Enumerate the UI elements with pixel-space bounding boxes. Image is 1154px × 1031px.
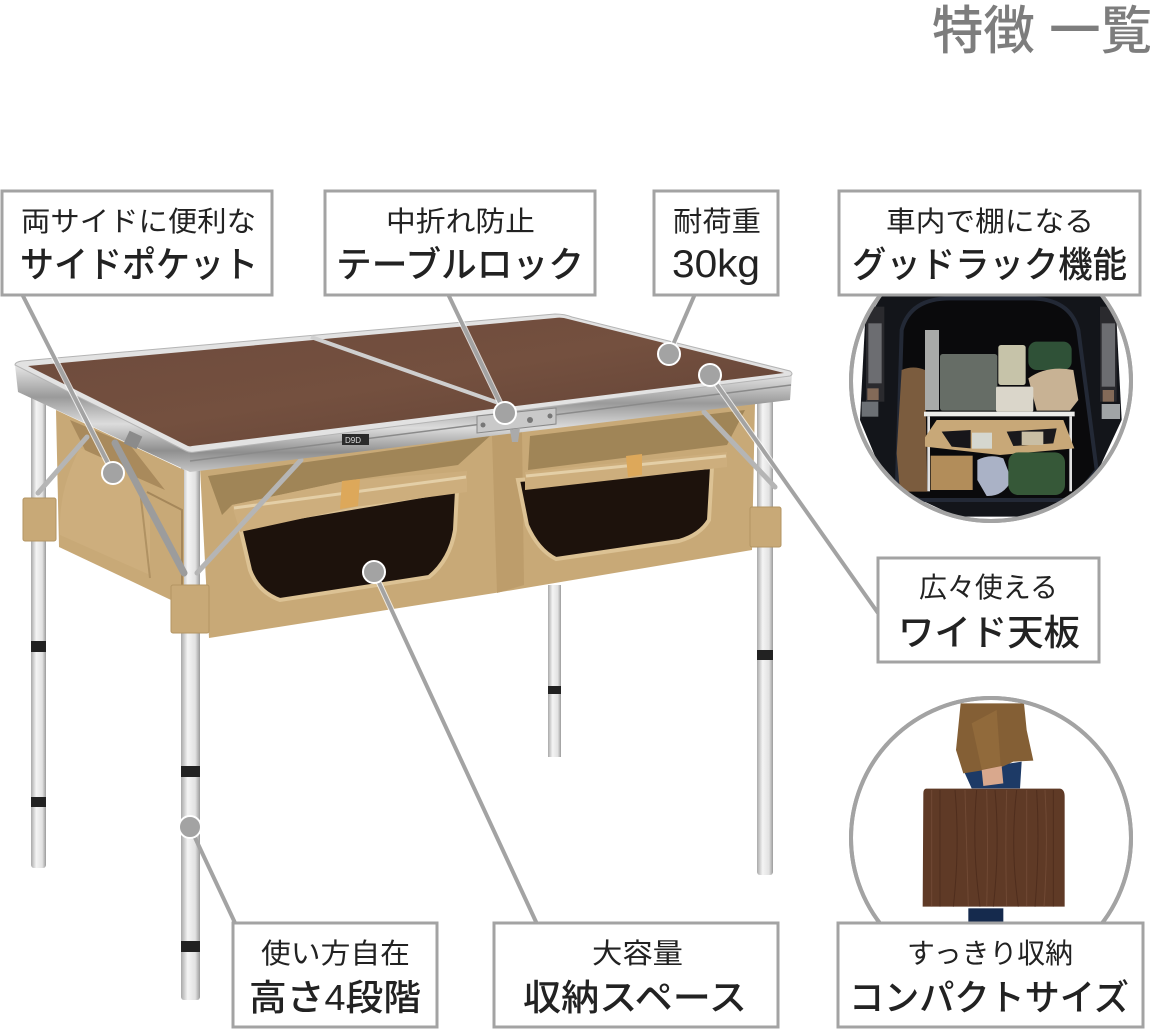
leader: side pocket — [22, 294, 124, 484]
leader: height — [179, 816, 236, 925]
callout: good rack — [839, 191, 1140, 295]
trunk opening — [897, 298, 1097, 500]
leader: load — [658, 294, 695, 365]
callout: good rack: グッドラック機能 — [852, 244, 1127, 285]
inset photo: carrying folded table — [849, 696, 1133, 922]
beige water jug — [998, 345, 1026, 385]
green duffel — [1008, 452, 1065, 495]
callout: side pocket — [2, 191, 272, 295]
callout: table lock: 中折れ防止 — [386, 206, 535, 237]
shelf table — [924, 412, 1075, 491]
leg sleeves — [23, 498, 781, 633]
beige sack — [1028, 369, 1078, 411]
callout: storage: 収納スペース — [523, 977, 747, 1018]
callout: height: 高さ4段階 — [249, 977, 421, 1018]
left storage window — [240, 490, 457, 600]
callout: storage — [494, 923, 778, 1027]
person legs — [963, 762, 1022, 923]
right storage window — [518, 467, 712, 559]
grey storage box — [940, 354, 997, 411]
rolled window flaps — [232, 452, 727, 532]
callout: height — [233, 923, 437, 1027]
leader: wide top — [699, 364, 878, 613]
folding table product illustration — [15, 314, 792, 1000]
callout: side pocket: サイドポケット — [20, 244, 258, 285]
folded table — [925, 330, 939, 410]
rear left leg — [31, 395, 46, 868]
green bag — [1028, 342, 1072, 370]
callout: compact: コンパクトサイズ — [849, 977, 1129, 1018]
shelf storage bag — [925, 420, 1074, 455]
tail lights — [862, 307, 1120, 419]
title: 特徴 一覧 — [932, 3, 1152, 61]
jacket sleeve — [972, 710, 1001, 769]
front leg — [181, 465, 200, 1000]
car body — [860, 293, 1122, 517]
leader: storage — [363, 561, 537, 924]
callout: compact — [838, 923, 1143, 1027]
callout: wide top — [878, 558, 1099, 662]
leader lines and dots — [22, 294, 878, 925]
brown jacket — [956, 703, 1033, 773]
inset photo: car luggage rack — [849, 296, 1133, 523]
table frame sides — [15, 365, 792, 472]
white cooler — [996, 387, 1033, 412]
callout: storage: 大容量 — [592, 938, 683, 969]
side latch — [124, 431, 142, 449]
storage bag front — [200, 402, 755, 638]
callout: good rack: 車内で棚になる — [886, 206, 1094, 237]
callout: load capacity — [654, 191, 778, 295]
leader: table lock — [448, 294, 516, 424]
basket — [931, 456, 973, 490]
hand — [982, 766, 1003, 786]
brand label — [342, 434, 369, 445]
right leg — [757, 400, 773, 875]
callout: table lock — [325, 191, 595, 295]
callout: wide top: 広々使える — [919, 572, 1058, 603]
table top — [15, 314, 792, 452]
folding braces — [38, 412, 775, 573]
callout: table lock: テーブルロック — [336, 244, 584, 285]
callout: load capacity: 30kg — [672, 243, 760, 286]
callout: compact: すっきり収納 — [907, 938, 1073, 969]
callout: load capacity: 耐荷重 — [673, 206, 761, 237]
rear right leg — [548, 585, 561, 757]
folded table wood panel — [923, 789, 1065, 907]
side pocket of storage bag — [56, 410, 184, 600]
lock hinge plate — [477, 408, 556, 442]
brand label: D9D — [345, 436, 361, 445]
callout: side pocket: 両サイドに便利な — [21, 206, 256, 237]
blue grey sleeping bag — [977, 456, 1012, 496]
callout: wide top: ワイド天板 — [898, 612, 1080, 653]
callout: height: 使い方自在 — [261, 938, 410, 969]
photo ring — [851, 241, 1131, 521]
brown tent bag — [897, 367, 927, 492]
